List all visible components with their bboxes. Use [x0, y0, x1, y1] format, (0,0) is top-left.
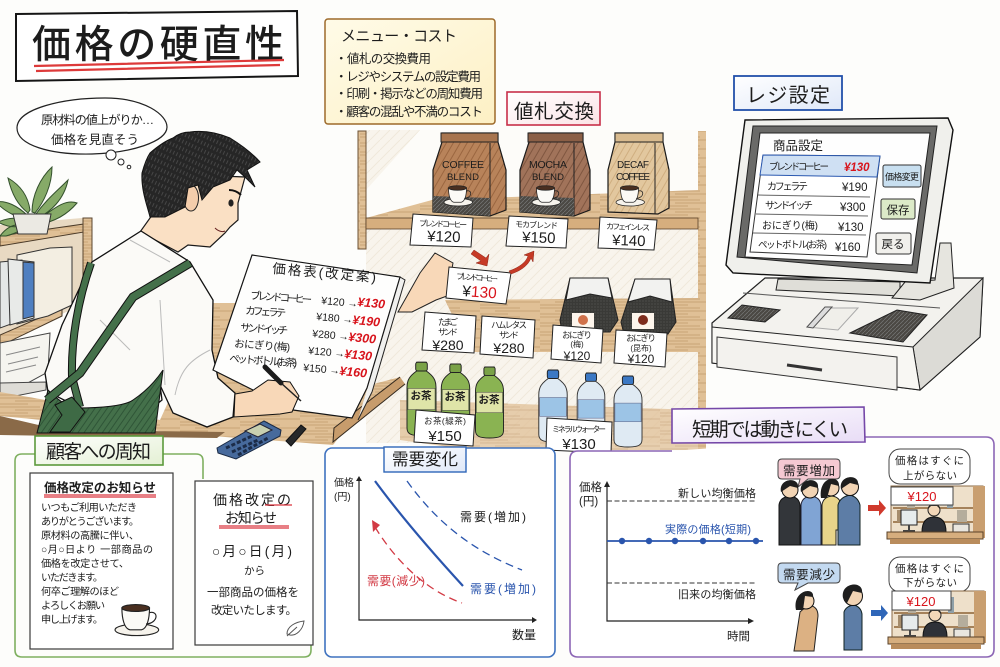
person: おにぎり(梅) — [234, 337, 291, 354]
person: ¥130 — [357, 295, 386, 311]
heading: price tag change: 値札交換 — [514, 101, 594, 123]
notice card 2: から — [244, 565, 265, 577]
green tea bottles: お茶 — [410, 389, 432, 402]
panel: hard to move in the short term: 短期では動きにくい — [692, 419, 848, 441]
cash register: サンドイッチ — [765, 200, 813, 212]
cash register: おにぎり(梅) — [762, 219, 818, 232]
speech: price does not go down: 価格はすぐに — [895, 562, 964, 575]
notice card 2: 価格改定の — [213, 492, 291, 508]
panel: demand change — [325, 447, 555, 657]
customers queue — [779, 477, 860, 545]
arrow: red — [868, 500, 886, 516]
tea tag: お茶(緑茶) — [424, 416, 466, 426]
ham lettuce tag: ¥280 — [492, 340, 525, 356]
cash register: ¥300 — [839, 202, 866, 214]
coffee bag: mocha blend: BLEND — [532, 172, 564, 183]
person: ¥180 → — [315, 311, 353, 326]
customers walking away — [794, 584, 862, 651]
bubble: demand up: 需要増加 — [783, 464, 835, 478]
icon: coffee cup — [115, 605, 159, 636]
apron — [37, 370, 163, 433]
price tag: blend coffee 120: ¥120 — [426, 228, 461, 246]
person: ブレンドコーヒー — [250, 289, 313, 306]
person: カフェラテ — [245, 305, 287, 320]
new price tag 130: ¥130 — [461, 283, 498, 302]
sandwich tags: たまご — [438, 317, 458, 327]
thought bubble: 原材料の値上がりか… — [41, 112, 154, 127]
notice card 1: 申し上げます。 — [41, 613, 103, 626]
price time chart: 実際の価格(短期) — [665, 522, 751, 536]
price sheet — [358, 277, 405, 420]
register base — [712, 278, 983, 390]
demand chart: 需要(増加) — [460, 510, 526, 524]
menu cost panel: ・印刷・掲示などの周知費用 — [335, 86, 483, 101]
onigiri tag: kombu: ¥120 — [627, 352, 655, 366]
icon: marker — [286, 425, 306, 446]
bubble: demand up — [778, 459, 840, 487]
notice card 1 — [30, 473, 173, 649]
coffee bag: coffee blend: BLEND — [447, 172, 479, 183]
title — [16, 11, 298, 81]
cash register: ¥130 — [837, 222, 864, 234]
person: ¥280 → — [311, 328, 349, 343]
notice card 1: 何卒ご理解のほど — [41, 585, 119, 598]
icon: calculator — [217, 421, 281, 459]
sandwich tags: ¥280 — [431, 337, 464, 353]
heading: price tag change — [507, 92, 600, 125]
onigiri tag: ume — [551, 325, 603, 363]
menu cost panel: ・値札の交換費用 — [335, 51, 431, 66]
bubble: demand down — [778, 563, 840, 590]
notice card 1: 原材料の高騰に伴い、 — [41, 529, 139, 542]
tea tag — [414, 410, 475, 446]
onigiri tag: ume: (梅) — [570, 339, 584, 349]
price tag: mocha 150: ¥150 — [521, 229, 556, 247]
person — [37, 131, 405, 433]
menu cost panel — [325, 19, 495, 124]
menu cost panel: メニュー・コスト — [341, 28, 457, 45]
cash register: 保存 — [886, 203, 910, 217]
title: 価格の硬直性 — [32, 24, 284, 67]
ham lettuce tag — [480, 316, 535, 358]
panel: hard to move in the short term — [570, 407, 994, 657]
hair — [142, 131, 260, 217]
green tea bottles — [407, 362, 504, 438]
coffee bag: decaf coffee: COFFEE — [616, 172, 650, 183]
price time chart: (円) — [579, 496, 598, 508]
onigiri bags — [560, 278, 676, 334]
onigiri tag: kombu — [614, 330, 667, 367]
demand chart: 数量 — [512, 627, 536, 642]
price tag: decaf 140: カフェインレス — [606, 222, 650, 233]
monitor — [726, 118, 953, 283]
notice card 2: ○月○日(月) — [212, 544, 292, 559]
shop counter: ¥120 — [906, 594, 935, 609]
panel: customer notice — [15, 436, 313, 657]
notice card 1: 価格を改定させて、 — [41, 557, 129, 570]
water tag — [546, 418, 612, 453]
thought bubble — [17, 98, 167, 169]
person: ¥120 → — [320, 295, 358, 310]
coffee bag: decaf coffee: DECAF — [617, 160, 649, 171]
coffee bag: coffee blend — [433, 133, 506, 216]
notice card 1: よろしくお願い — [41, 600, 105, 612]
person: ¥160 — [339, 364, 368, 380]
person: ¥120 → — [307, 345, 345, 360]
demand chart: 需要(増加) — [470, 582, 536, 596]
notice card 2 — [195, 481, 313, 645]
menu cost panel: ・顧客の混乱や不満のコスト — [335, 104, 483, 119]
price tag: mocha 150: モカブレンド — [515, 219, 558, 230]
green tea bottles: お茶 — [444, 390, 466, 403]
cash register: 商品設定 — [773, 139, 823, 153]
sandwich tags — [422, 312, 476, 353]
back shelf with binders — [0, 218, 92, 346]
monitor stand — [776, 279, 900, 296]
notice card 1: ○月○日より 一部商品の — [41, 543, 153, 556]
cash register: カフェラテ — [767, 181, 808, 193]
price time chart: 旧来の均衡価格 — [678, 587, 756, 601]
price time chart: 価格 — [579, 480, 602, 494]
cash register: ペットボトル(お茶) — [758, 239, 827, 251]
price tag: blend coffee 120: ブレンドコーヒー — [419, 218, 467, 230]
cash register: ブレンドコーヒー — [769, 161, 829, 173]
new price tag 130: ブレンドコーヒー — [456, 271, 498, 284]
green tea bottles: お茶 — [478, 393, 500, 406]
ham lettuce tag: サンド — [499, 330, 519, 340]
notice card 1: いただきます。 — [41, 572, 103, 584]
ham lettuce tag: ハムレタス — [491, 320, 527, 330]
coffee bag: coffee blend: COFFEE — [442, 159, 484, 171]
heading: register settings — [734, 76, 842, 110]
notice card 2: 改定いたします。 — [211, 603, 297, 617]
person: ¥150 → — [302, 362, 340, 377]
person: ペットボトル(お茶) — [229, 352, 298, 370]
shop counter: ¥120 — [907, 489, 936, 504]
demand chart — [334, 476, 537, 642]
panel: customer notice: 顧客への周知 — [46, 441, 151, 463]
shop counter — [888, 591, 986, 649]
price tag: decaf 140 — [598, 217, 657, 250]
cash register: ¥160 — [834, 242, 861, 254]
icon: ear — [184, 185, 198, 211]
heading: short term — [672, 407, 865, 443]
new price tag 130 — [446, 267, 511, 304]
stack of papers — [0, 333, 50, 399]
cash register — [712, 118, 983, 390]
price tag: blend coffee 120 — [410, 214, 473, 247]
screen — [745, 133, 930, 265]
speech: price does not go down — [889, 557, 970, 592]
notice card 1: いつもご利用いただき — [41, 501, 137, 514]
coffee bag: decaf coffee — [608, 133, 669, 214]
demand chart: (円) — [334, 492, 351, 503]
eye and brow — [229, 190, 241, 195]
speech: price does not go up — [889, 449, 970, 484]
price time chart — [579, 480, 763, 643]
screen buttons — [883, 165, 921, 187]
coffee bag: mocha blend: MOCHA — [529, 159, 567, 171]
sandwich tags: サンド — [438, 327, 458, 337]
cash register: 価格変更 — [885, 171, 919, 182]
coffee bag: mocha blend — [520, 133, 590, 216]
menu cost panel: ・レジやシステムの設定費用 — [335, 69, 481, 84]
arrows: tag swap — [471, 250, 534, 274]
water bottles — [539, 370, 642, 447]
heading: register settings: レジ設定 — [746, 84, 830, 107]
price time chart: 時間 — [727, 630, 750, 643]
shop counter — [887, 486, 985, 544]
tea tag: ¥150 — [427, 428, 462, 445]
store shelf — [358, 130, 706, 451]
speech: price does not go down: 下がらない — [903, 576, 957, 589]
bubble: demand down: 需要減少 — [783, 567, 835, 582]
price tag: mocha 150 — [506, 216, 568, 248]
onigiri tag: kombu: (昆布) — [630, 343, 652, 353]
heading: demand change — [384, 447, 466, 472]
speech: price does not go up: 価格はすぐに — [895, 454, 964, 467]
onigiri tag: kombu: おにぎり — [626, 333, 656, 343]
water tag: ミネラルウォーター — [552, 425, 606, 434]
price tag: decaf 140: ¥140 — [611, 232, 646, 250]
neck and face — [140, 175, 245, 252]
cash register: ¥130 — [844, 162, 870, 174]
onigiri tag: ume: おにぎり — [562, 330, 592, 340]
notice card 1: ありがとうございます。 — [41, 515, 139, 528]
cash register: 戻る — [882, 239, 904, 251]
speech: price does not go up: 上がらない — [903, 469, 957, 482]
person: ¥130 — [344, 347, 373, 363]
hand holding new tag — [398, 253, 453, 312]
sheet text: 価格表(改定案) — [272, 261, 377, 285]
onigiri tag: ume: ¥120 — [563, 349, 591, 363]
desk — [0, 303, 405, 445]
thought bubble: 価格を見直そう — [51, 132, 139, 147]
person: サンドイッチ — [240, 322, 289, 337]
notice card 1: 価格改定のお知らせ — [44, 480, 156, 495]
writing hand with pen — [234, 380, 299, 417]
notice card 2: お知らせ — [225, 510, 277, 526]
arrow: blue — [871, 605, 888, 621]
person: ¥300 — [348, 330, 377, 346]
panel: demand change: 需要変化 — [392, 450, 458, 469]
demand chart: 価格 — [334, 476, 354, 489]
price time chart: 新しい均衡価格 — [678, 486, 756, 500]
water tag: ¥130 — [561, 436, 596, 453]
icon: potted plant — [0, 167, 77, 236]
heading: customer notice — [35, 436, 163, 465]
person: ¥190 — [352, 313, 381, 329]
demand chart: 需要(減少) — [367, 573, 425, 588]
shirt — [45, 231, 235, 427]
icon: leaf — [287, 621, 304, 636]
cash register: ¥190 — [841, 182, 868, 194]
notice card 2: 一部商品の価格を — [207, 585, 299, 599]
